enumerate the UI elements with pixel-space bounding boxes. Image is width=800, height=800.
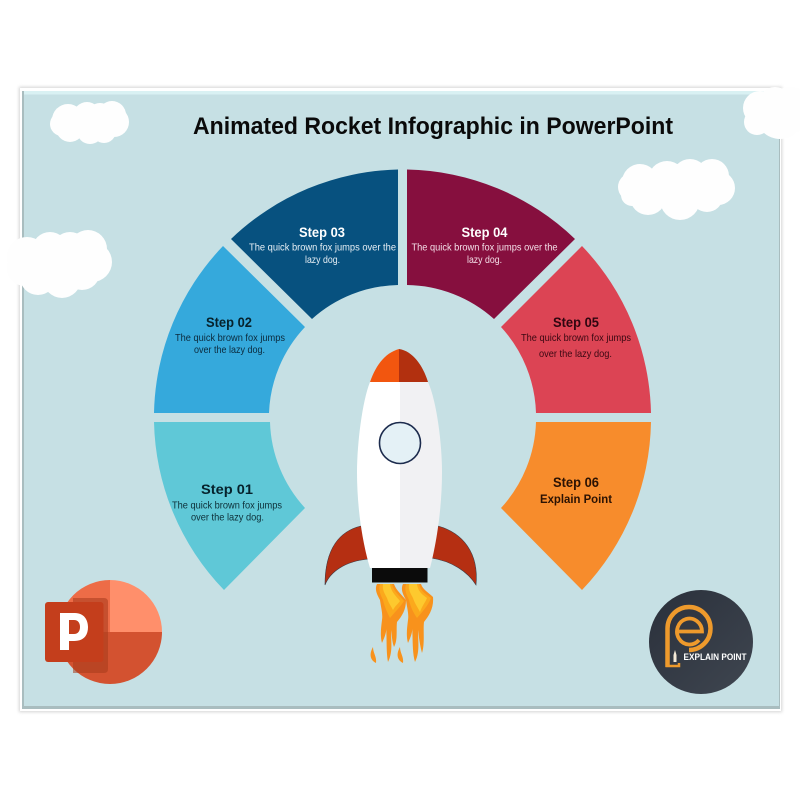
icon: left fin	[325, 526, 369, 585]
panel: step 01: Step 01	[201, 481, 253, 497]
rocket	[325, 349, 476, 663]
panel: step 04: Step 04	[462, 225, 508, 240]
panel: step 03: lazy dog.	[305, 255, 340, 266]
panel: step 02: The quick brown fox jumps	[175, 333, 285, 344]
icon: right fin	[431, 526, 476, 585]
icon: engine nozzle	[372, 568, 428, 582]
icon: Explain Point logo	[649, 590, 753, 694]
panel: step 06	[501, 422, 651, 590]
title: Animated Rocket Infographic in PowerPoint	[193, 113, 673, 140]
panel: step 06: Explain Point	[540, 492, 612, 506]
panel: step 02: Step 02	[206, 315, 252, 330]
panel: step 05: Step 05	[553, 315, 599, 330]
icon: flames	[371, 584, 433, 663]
panel: step 03: The quick brown fox jumps over the	[249, 242, 396, 254]
panel: slide background	[19, 87, 782, 712]
cloud: top left	[50, 101, 129, 144]
panel: step 02: over the lazy dog.	[194, 345, 265, 356]
panel: step 04: lazy dog.	[467, 255, 502, 266]
panel: step 01: The quick brown fox jumps	[172, 500, 282, 512]
panel: step 01: over the lazy dog.	[191, 512, 264, 524]
cloud: top right corner	[743, 87, 800, 139]
panel: step 02	[154, 246, 305, 413]
icon: PowerPoint logo	[45, 580, 162, 684]
cloud: upper right	[618, 159, 735, 220]
panel: step 04: The quick brown fox jumps over the	[412, 242, 558, 254]
panel: step 01	[154, 422, 305, 590]
icon: rocket nose	[370, 349, 428, 382]
panel: step 06: Step 06	[553, 475, 599, 490]
panel: step 05	[501, 246, 651, 413]
panel: step 03: Step 03	[299, 225, 345, 240]
panel: step 05: The quick brown fox jumps	[521, 333, 631, 344]
cloud: left edge	[7, 230, 112, 298]
icon: porthole	[380, 422, 420, 464]
panel: step 04	[407, 170, 575, 319]
panel: step 03	[231, 170, 398, 319]
panel: step 05: over the lazy dog.	[539, 349, 612, 360]
icon: rocket body	[357, 382, 442, 568]
text: logo wordmark: EXPLAIN POINT	[684, 652, 747, 662]
